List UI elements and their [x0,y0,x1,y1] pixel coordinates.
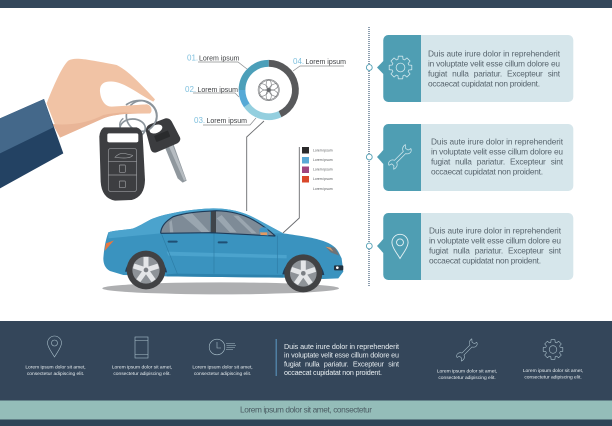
legend [302,147,333,191]
icon: gear [389,56,412,79]
footer banner: Lorem ipsum dolor sit amet, consectetur [240,404,372,414]
icon: remote fob [99,127,145,201]
icon: hand [47,59,155,138]
footer item: phone: consectetur adipiscing elit. [113,371,171,377]
label 04: 04. [293,57,304,66]
card text: fugiat nulla pariatur. Excepteur sint [428,68,561,78]
footer center text: in voluptate velit esse cillum dolore eu [284,350,399,360]
legend: Lorem ipsum [313,168,333,172]
rear wheel [125,251,167,289]
timeline node [366,154,372,160]
card text: in voluptate velit esse cillum dolore eu [431,146,563,156]
connector lines to car [247,121,299,233]
car body [103,208,343,279]
footer center text: occaecat cupidatat non proident. [284,368,382,377]
card text: in voluptate velit esse cillum dolore eu [428,58,560,68]
card text: occaecat cupidatat non proident. [429,256,541,266]
footer item: gear: Lorem ipsum dolor sit amet, [523,368,583,374]
lights [105,240,114,251]
donut labels with leader lines: Lorem ipsum [199,56,240,62]
card text: Duis aute irure dolor in reprehenderit [431,136,564,146]
segment 02 blue [242,90,247,105]
footer item: phone: Lorem ipsum dolor sit amet, [112,364,172,370]
footer item: clock: consectetur adipiscing elit. [194,371,251,377]
front wheel [282,254,324,292]
timeline node [366,243,372,249]
legend: Lorem ipsum [313,148,333,152]
segment 04 dark grey [269,63,295,114]
panel: footer [0,321,612,401]
legend: Lorem ipsum [313,187,333,191]
footer item: wrench: consectetur adipiscing elit. [438,375,496,381]
segment 03 light blue [247,105,280,117]
footer item: wrench: Lorem ipsum dolor sit amet, [437,368,497,374]
legend: Lorem ipsum [313,177,333,181]
lower sill [167,274,283,278]
door handles [168,241,178,243]
footer item: location: consectetur adipiscing elit. [27,371,84,377]
car shadow [102,282,339,294]
footer item: clock [192,339,253,377]
timeline node [366,65,372,70]
segment 01 teal [242,63,269,90]
footer item: location [25,336,86,377]
label 02: 02. [185,85,196,94]
panel: info card 1 [366,35,573,102]
label 03: 03. [194,116,205,125]
footer item: gear: consectetur adipiscing elit. [524,374,582,380]
legend: Lorem ipsum [313,158,333,162]
panel: info card 2 [366,124,573,191]
footer center text [276,339,399,377]
icon: jacket sleeve [0,99,63,188]
timeline dotted line [368,27,370,287]
donut labels with leader lines: Lorem ipsum [198,87,238,94]
footer banner [0,400,612,420]
key rings [120,101,157,138]
icon: wheel rim [258,79,279,101]
donut labels with leader lines: Lorem ipsum [306,59,346,66]
side stripe [167,252,287,258]
icon: location pin [392,234,408,258]
donut labels with leader lines: Lorem ipsum [206,118,247,125]
card text: Duis aute irure dolor in reprehenderit [429,226,562,236]
footer item: clock: Lorem ipsum dolor sit amet, [192,364,253,370]
card text: fugiat nulla pariatur. Excepteur sint [429,246,562,256]
footer item: phone [112,337,172,377]
footer center text: Duis aute irure dolor in reprehenderit [284,342,399,351]
card text: occaecat cupidatat non proident. [428,78,540,88]
side mirror [259,227,268,236]
footer item: wrench [437,338,497,381]
card text: fugiat nulla pariatur. Excepteur sint [431,156,564,166]
panel: info card 3 [366,213,573,280]
icon: car key [146,118,187,183]
card text: occaecat cupidatat non proident. [431,166,543,176]
car windows [161,211,211,233]
donut chart [242,63,295,117]
top header bar [0,0,612,8]
roof highlight [108,208,283,238]
footer item: gear [523,340,583,380]
illustration: blue sedan car [102,208,343,294]
bottom bar [0,420,612,426]
card text: Duis aute irure dolor in reprehenderit [428,48,561,58]
illustration: hand holding car keys [0,59,187,201]
icon: wrench [387,144,413,170]
label 01: 01. [187,54,198,62]
card text [431,136,564,176]
card text: in voluptate velit esse cillum dolore eu [429,236,561,246]
card text [428,48,561,88]
footer center text: fugiat nulla pariatur. Excepteur sint [284,360,399,368]
card text [429,226,562,266]
footer item: location: Lorem ipsum dolor sit amet, [25,364,86,370]
donut labels with leader lines [185,54,346,125]
key ring foreground [126,100,157,130]
